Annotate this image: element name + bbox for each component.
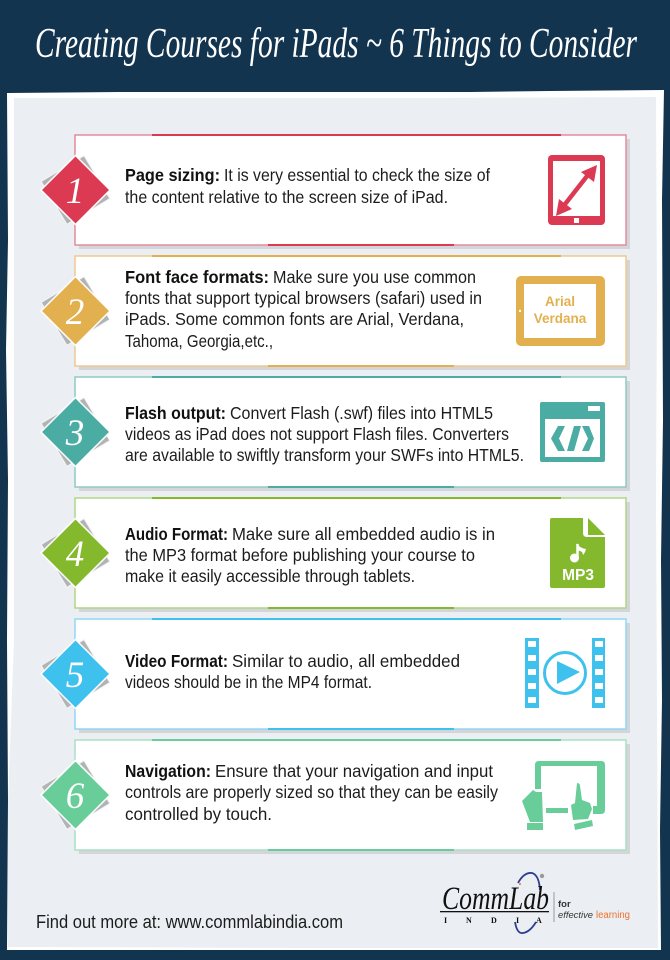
- card 1: page sizing: [41, 135, 630, 249]
- logo: CommLab India: A: [536, 916, 542, 925]
- badge 2: [41, 276, 110, 346]
- badge 5: [41, 640, 110, 708]
- badge 1: 1: [66, 171, 84, 212]
- icon: MP3 file: [550, 518, 605, 588]
- icon: tablet with resize arrow: [548, 155, 605, 225]
- card 4: audio format: [41, 498, 630, 612]
- text: page sizing: Page sizing:: [125, 165, 220, 185]
- icon: MP3 file: MP3: [562, 567, 594, 584]
- text: navigation: [125, 761, 498, 824]
- card 3: flash output: [41, 377, 630, 491]
- text: video format: videos should be in the MP4 format.: [125, 672, 372, 692]
- badge 2: 2: [66, 292, 84, 333]
- icon: hands on tablet: [522, 761, 605, 830]
- text: navigation: Ensure that your navigation and input: [215, 761, 493, 781]
- icon: tablet with font names: [516, 276, 605, 346]
- text: audio format: make it easily accessible through tablets.: [125, 566, 415, 586]
- badge 3: 3: [65, 413, 84, 454]
- badge 1: [41, 156, 110, 224]
- icon: tablet with font names: Verdana: [534, 311, 587, 326]
- icon: code window: [540, 402, 605, 462]
- text: audio format: Make sure all embedded audio is in: [232, 524, 495, 544]
- badge 4: 4: [66, 534, 84, 575]
- text: video format: [125, 651, 460, 692]
- text: font face formats: fonts that support typical browsers (safari) used in: [125, 288, 482, 308]
- text: navigation: controls are properly sized so that they can be easily: [125, 782, 498, 802]
- badge 5: 5: [66, 655, 84, 696]
- logo: CommLab India: I: [516, 916, 519, 925]
- text: flash output: videos as iPad does not support Flash files. Converters: [125, 424, 509, 444]
- text: video format: Video Format:: [125, 651, 228, 671]
- text: page sizing: It is very essential to check the size of: [224, 165, 490, 185]
- icon: tablet with font names: Arial: [545, 294, 575, 309]
- text: font face formats: Font face formats:: [125, 267, 269, 287]
- logo: CommLab India: for: [558, 899, 571, 910]
- text: page sizing: [125, 165, 490, 207]
- text: audio format: the MP3 format before publishing your course to: [125, 545, 475, 565]
- footer link text: Find out more at: www.commlabindia.com: [36, 912, 343, 932]
- text: font face formats: iPads. Some common fonts are Arial, Verdana,: [125, 309, 464, 329]
- text: navigation: controlled by touch.: [125, 804, 272, 824]
- logo: CommLab India: learning: [596, 910, 630, 921]
- text: flash output: are available to swiftly transform your SWFs into HTML5.: [125, 445, 524, 465]
- text: page sizing: the content relative to the screen size of iPad.: [125, 187, 448, 207]
- text: font face formats: Tahoma, Georgia,etc.,: [125, 331, 273, 351]
- text: video format: Similar to audio, all embedded: [232, 651, 460, 671]
- logo: CommLab India: D: [491, 916, 497, 925]
- text: navigation: Navigation:: [125, 761, 211, 781]
- badge 4: [41, 518, 110, 588]
- logo: CommLab India: N: [466, 916, 472, 925]
- text: flash output: [125, 403, 524, 465]
- badge 3: [41, 398, 110, 466]
- text: flash output: Convert Flash (.swf) files into HTML5: [230, 403, 493, 423]
- icon: video film strip with play button: [525, 638, 605, 708]
- text: font face formats: [125, 267, 482, 351]
- logo: CommLab India: effective: [558, 910, 593, 920]
- text: audio format: [125, 524, 495, 586]
- text: font face formats: Make sure you use common: [273, 267, 476, 287]
- logo: CommLab India: [440, 873, 630, 933]
- text: flash output: Flash output:: [125, 403, 226, 423]
- text: audio format: Audio Format:: [125, 524, 228, 544]
- card 2: font face formats: [41, 256, 630, 370]
- logo: CommLab India: I: [444, 916, 447, 925]
- logo: CommLab India: CommLab: [442, 881, 549, 917]
- card 5: video format: [41, 619, 630, 733]
- badge 6: 6: [66, 776, 85, 817]
- card 6: navigation: [41, 740, 630, 854]
- badge 6: [41, 760, 110, 830]
